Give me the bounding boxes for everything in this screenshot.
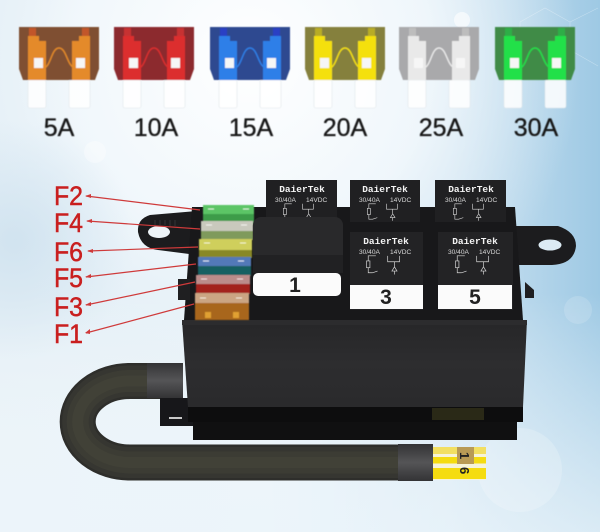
fuse 5A: 5A — [44, 114, 75, 142]
fuse box housing — [178, 207, 534, 440]
fuse 5A — [19, 27, 99, 142]
fuse stack — [195, 205, 254, 320]
relay top right: 30/40A — [445, 197, 467, 204]
fuse 20A — [305, 27, 385, 142]
label F5: F5 — [54, 263, 83, 293]
relay 5 with label: 5 — [469, 286, 481, 309]
fuse F2 green — [203, 205, 254, 225]
fuse 30A: 30A — [514, 114, 559, 142]
relay 1 with label: 1 — [289, 274, 301, 297]
fuse 25A — [399, 27, 479, 142]
label F6: F6 — [54, 237, 83, 267]
relay 3 with label: 14VDC — [390, 249, 411, 256]
wires with labels — [433, 447, 486, 480]
relay top right — [435, 180, 506, 222]
wires with labels: 6 — [457, 467, 472, 474]
relay 3 with label: 3 — [380, 286, 392, 309]
fuse F5 blue — [198, 257, 251, 276]
relay top left — [266, 180, 337, 222]
label F4: F4 — [54, 208, 83, 238]
label F3: F3 — [54, 292, 83, 322]
relay top right: 14VDC — [476, 197, 497, 204]
relay top middle: 30/40A — [359, 197, 381, 204]
arrow F2 — [85, 194, 200, 210]
body — [182, 320, 527, 407]
fuse 10A — [114, 27, 194, 142]
arrow F5 — [85, 264, 196, 278]
fuse F3 red — [196, 275, 250, 294]
arrow F3 — [85, 282, 195, 306]
relay 3 with label: DaierTek — [363, 236, 409, 247]
relay 5 with label: 30/40A — [448, 249, 470, 256]
relay top left: 14VDC — [306, 197, 327, 204]
relay 5 with label — [438, 232, 513, 310]
fuse 15A — [210, 27, 290, 142]
right mounting ear — [515, 226, 576, 265]
relay top left: 30/40A — [275, 197, 297, 204]
fuse 20A: 20A — [323, 114, 368, 142]
arrow F6 — [87, 247, 198, 253]
left mounting ear — [138, 211, 197, 255]
relay 5 with label: DaierTek — [452, 236, 498, 247]
wires with labels: 1 — [457, 452, 472, 459]
relay top middle — [350, 180, 420, 222]
lower base — [188, 407, 523, 422]
fuse callouts — [54, 181, 200, 349]
relay 3 with label — [350, 232, 423, 310]
fuse 30A — [495, 27, 575, 142]
arrow F1 — [85, 304, 194, 334]
fuse 25A: 25A — [419, 114, 464, 142]
lid — [184, 207, 523, 320]
relay top right: DaierTek — [448, 184, 494, 195]
fuse row — [19, 27, 575, 142]
fuse F4 white — [201, 221, 253, 240]
relay 1 with label — [253, 217, 343, 297]
fuse 10A: 10A — [134, 114, 179, 142]
relay top middle: 14VDC — [390, 197, 411, 204]
relay top middle: DaierTek — [362, 184, 408, 195]
arrow F4 — [86, 219, 200, 229]
fuse F6 yellow — [199, 239, 252, 258]
fuse 15A: 15A — [229, 114, 274, 142]
mounting bracket — [160, 398, 194, 426]
fuse F1 orange — [195, 293, 249, 320]
relay 5 with label: 14VDC — [479, 249, 500, 256]
cable — [78, 363, 433, 481]
label F1: F1 — [54, 319, 83, 349]
relay top left: DaierTek — [279, 184, 325, 195]
label F2: F2 — [54, 181, 83, 211]
relay 3 with label: 30/40A — [359, 249, 381, 256]
